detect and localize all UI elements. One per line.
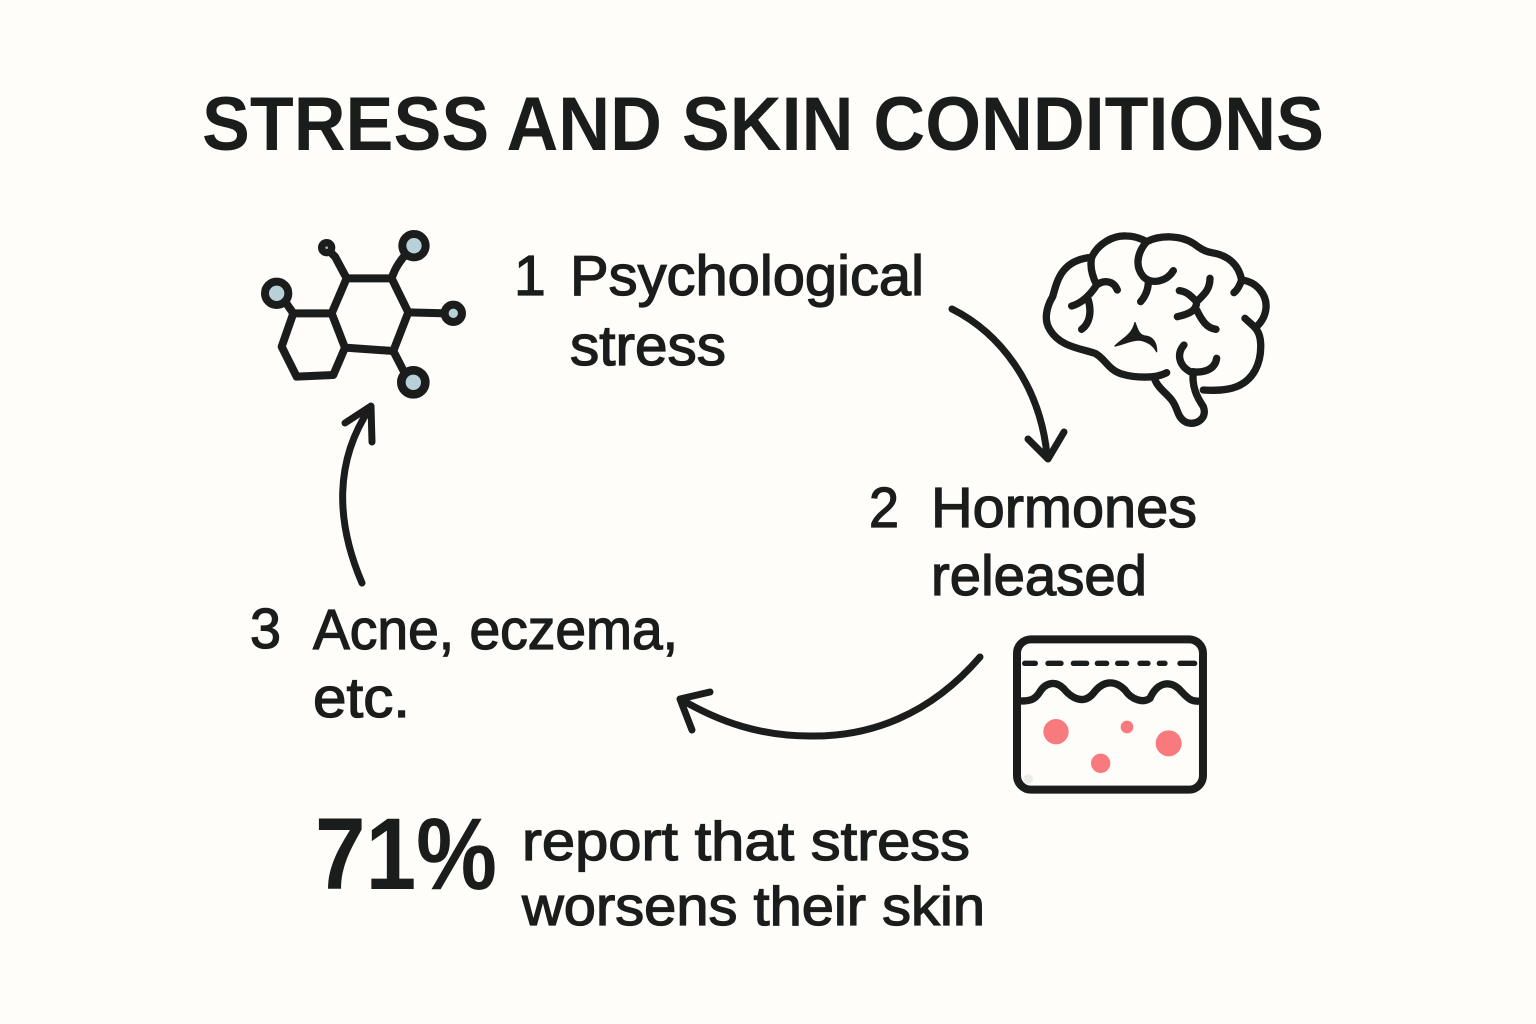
icon: molecule: [265, 234, 462, 394]
icon: skin cross-section: [1017, 639, 1203, 790]
step 3 label: 3: [250, 597, 281, 661]
title: STRESS AND SKIN CONDITIONS: [202, 82, 1324, 167]
step 2 label: released: [931, 544, 1147, 608]
step 3 label: etc.: [313, 666, 410, 730]
step 1 label: Psychological: [570, 244, 924, 308]
statistic caption: worsens their skin: [521, 875, 985, 937]
statistic: 71%: 71%: [315, 797, 497, 911]
statistic caption: [521, 810, 985, 937]
step 2 label: [869, 476, 1197, 608]
step 3 label: Acne, eczema,: [313, 598, 678, 662]
icon: brain: [1046, 236, 1266, 423]
step 2 label: Hormones: [931, 476, 1197, 540]
step 2 label: 2: [869, 476, 899, 540]
statistic caption: report that stress: [522, 810, 970, 872]
arrow: step 1 to step 2: [952, 309, 1064, 459]
step 1 label: 1: [514, 244, 546, 308]
arrow: step 2 to step 3: [680, 657, 980, 736]
step 1 label: stress: [570, 314, 726, 378]
step 1 label: [514, 244, 924, 378]
step 3 label: [250, 597, 678, 730]
arrow: step 3 to step 1: [343, 406, 372, 583]
